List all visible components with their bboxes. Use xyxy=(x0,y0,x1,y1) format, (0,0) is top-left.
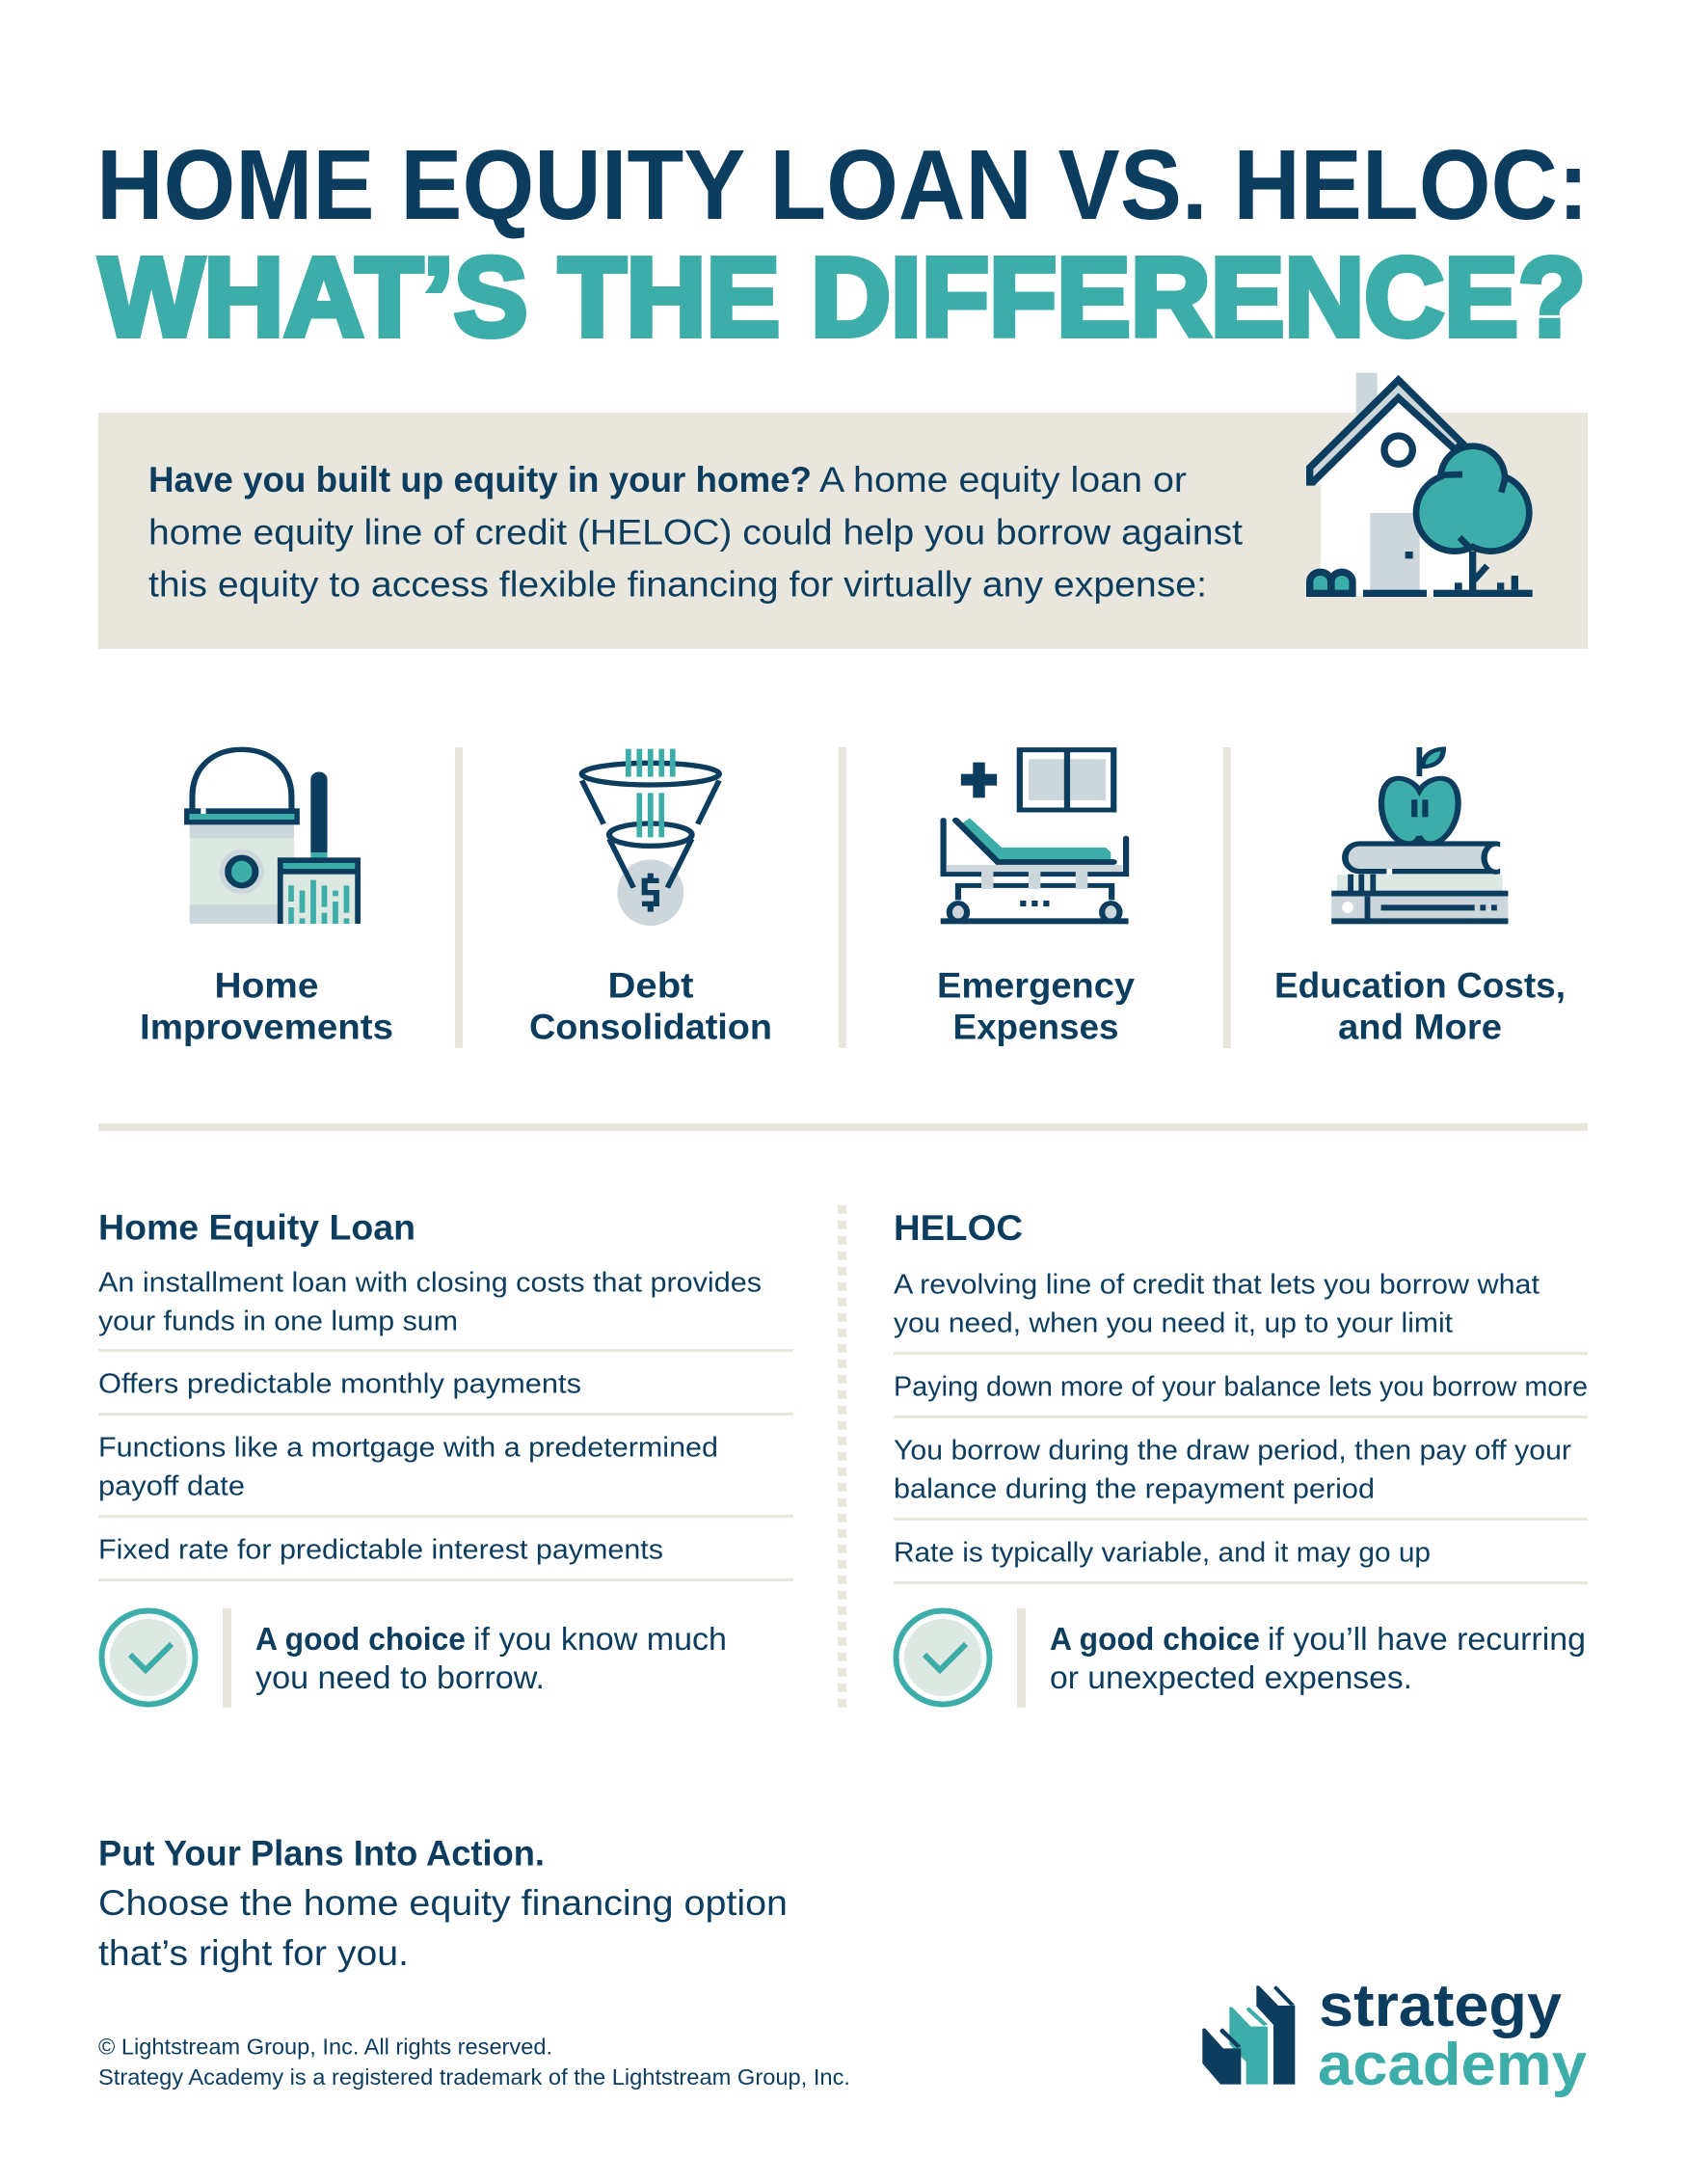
divider xyxy=(1223,747,1231,1048)
label: education costs xyxy=(1274,966,1566,1047)
intro text: Have you built up equity in your home? xyxy=(148,460,812,499)
list of features: An installment loan with closing costs that provides xyxy=(98,1267,762,1298)
title xyxy=(96,129,1589,360)
list of features: Rate is typically variable, and it may go up xyxy=(894,1537,1431,1568)
callout: good choice: A good choice xyxy=(1050,1621,1260,1657)
list of features: A revolving line of credit that lets you borrow what xyxy=(894,1269,1540,1300)
list of features: You borrow during the draw period, then pay off your xyxy=(894,1435,1571,1466)
panel: intro xyxy=(98,413,1588,649)
list of features: Paying down more of your balance lets you borrow more xyxy=(894,1371,1588,1402)
callout: good choice: if you’ll have recurring xyxy=(1268,1621,1586,1657)
label: education costs: Education Costs, xyxy=(1274,966,1566,1005)
logo: strategy academy xyxy=(1202,1973,1588,2098)
intro text: this equity to access flexible financing for virtually any expense: xyxy=(148,565,1207,604)
copyright: © Lightstream Group, Inc. All rights reserved. xyxy=(98,2035,552,2060)
logo wordmark: academy xyxy=(1318,2032,1588,2098)
copyright: Strategy Academy is a registered trademark of the Lightstream Group, Inc. xyxy=(98,2064,850,2090)
list of features: you need, when you need it, up to your limit xyxy=(894,1308,1453,1338)
logo wordmark xyxy=(1318,1973,1588,2098)
copyright xyxy=(98,2035,850,2090)
heading: HELOC xyxy=(894,1208,1023,1248)
callout: good choice: you need to borrow. xyxy=(255,1659,545,1695)
label: emergency expenses xyxy=(937,966,1135,1047)
callout: good choice: A good choice xyxy=(255,1621,466,1657)
list of features: Fixed rate for predictable interest payments xyxy=(98,1535,663,1566)
logo mark: books xyxy=(1202,1985,1295,2085)
list of features xyxy=(894,1269,1588,1584)
list of features: your funds in one lump sum xyxy=(98,1306,458,1336)
label: debt consolidation xyxy=(529,966,772,1047)
label: emergency expenses: Emergency xyxy=(937,966,1135,1005)
icon: check mark xyxy=(102,1610,195,1705)
logo wordmark: strategy xyxy=(1319,1973,1563,2039)
icon: check mark xyxy=(897,1610,989,1705)
callout: good choice: or unexpected expenses. xyxy=(1050,1659,1412,1695)
intro text: A home equity loan or xyxy=(819,460,1187,499)
label: home improvements: Improvements xyxy=(140,1007,393,1047)
callout: good choice xyxy=(1050,1621,1586,1695)
list of features: payoff date xyxy=(98,1471,245,1502)
callout: good choice xyxy=(255,1621,727,1695)
title: HOME EQUITY LOAN VS. HELOC: xyxy=(96,129,1589,240)
list of features xyxy=(98,1267,793,1581)
call to action: Put Your Plans Into Action. xyxy=(98,1834,545,1873)
call to action: that’s right for you. xyxy=(98,1933,409,1973)
callout: good choice: if you know much xyxy=(473,1621,727,1657)
list of features: balance during the repayment period xyxy=(894,1473,1375,1504)
label: emergency expenses: Expenses xyxy=(952,1007,1118,1047)
label: debt consolidation: Consolidation xyxy=(529,1007,772,1047)
panel: home equity loan xyxy=(98,1207,793,1708)
label: debt consolidation: Debt xyxy=(607,966,694,1005)
vertical dotted divider xyxy=(838,1205,846,1709)
icon: paint can and brush xyxy=(184,749,361,924)
icon: hospital bed xyxy=(941,750,1129,924)
icon: house xyxy=(1310,373,1533,597)
label: home improvements: Home xyxy=(214,966,318,1005)
call to action xyxy=(98,1834,788,1973)
intro text xyxy=(148,460,1244,604)
title: WHAT’S THE DIFFERENCE? xyxy=(99,234,1586,360)
label: home improvements xyxy=(140,966,393,1047)
label: education costs: and More xyxy=(1338,1007,1502,1047)
intro text: home equity line of credit (HELOC) could help you borrow against xyxy=(148,513,1244,552)
list of features: Functions like a mortgage with a predetermined xyxy=(98,1433,718,1464)
divider xyxy=(455,747,463,1048)
heading: Home Equity Loan xyxy=(98,1207,415,1248)
icon: apple on books xyxy=(1331,747,1516,924)
panel: heloc xyxy=(894,1208,1588,1708)
list of features: Offers predictable monthly payments xyxy=(98,1369,581,1400)
icon: funnel with dollar coin xyxy=(582,749,719,926)
divider xyxy=(839,747,846,1048)
call to action: Choose the home equity financing option xyxy=(98,1883,788,1923)
